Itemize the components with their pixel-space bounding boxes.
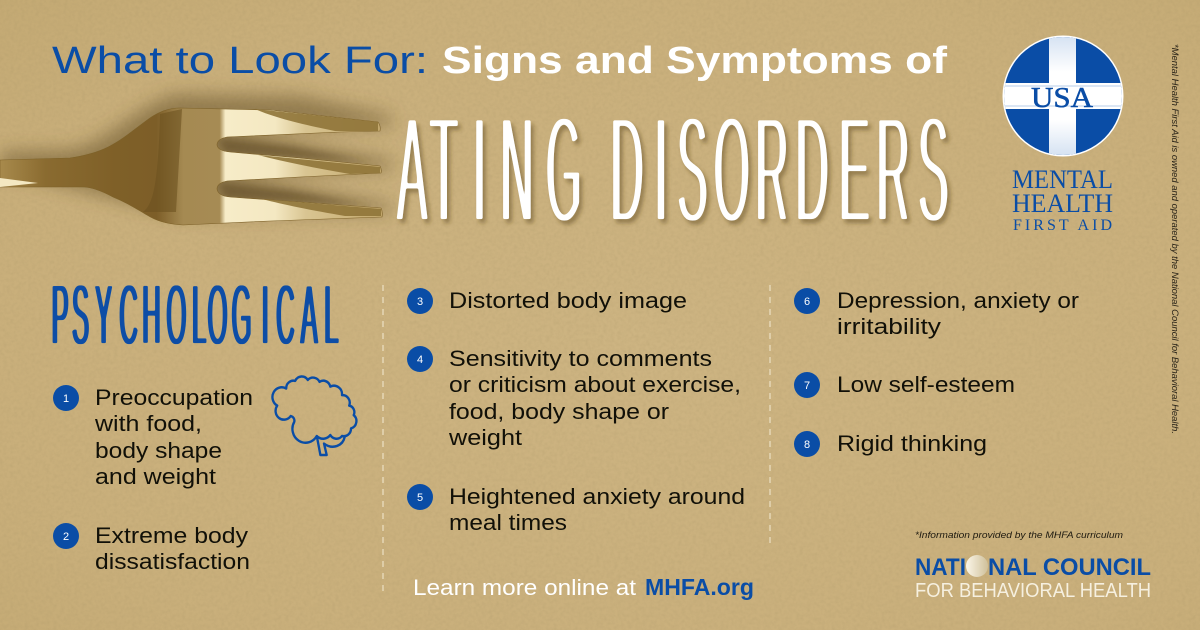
column 2: items 3-5 [407, 288, 745, 535]
logo: National Council for Behavioral Health: NAL COUNCIL [988, 554, 1151, 581]
item 4: 4 [417, 354, 423, 366]
item 2: Extreme body [95, 523, 248, 548]
icon: moon O [966, 555, 988, 577]
logo: Mental Health First Aid USA [1002, 36, 1124, 234]
column 1: items 1-2 [53, 385, 253, 574]
source note: *Information provided by the MHFA curriculum [915, 530, 1123, 541]
title line: What to Look For: Signs and Symptoms of: What to Look For: [52, 40, 428, 82]
item 1 [53, 385, 253, 489]
item 3: Distorted body image [449, 288, 687, 313]
heading: Psychological: PSYCHOLOGICAL [52, 268, 338, 363]
item 1: with food, [94, 411, 202, 436]
item 4: weight [448, 425, 522, 450]
fork highlights [0, 178, 38, 187]
item 6: Depression, anxiety or [837, 288, 1079, 313]
item 7 [794, 372, 1015, 398]
fork shadow [0, 94, 392, 215]
logo: National Council for Behavioral Health: NATI [915, 554, 966, 581]
item 1: and weight [95, 464, 216, 489]
column 3: items 6-8 [794, 288, 1079, 457]
item 6: irritability [837, 314, 941, 339]
item 4: Sensitivity to comments [449, 346, 712, 371]
logo wordmark: MENTAL [1012, 165, 1113, 194]
item 5: Heightened anxiety around [449, 484, 745, 509]
item 1: body shape [95, 438, 222, 463]
logo: National Council for Behavioral Health: FOR BEHAVIORAL HEALTH [915, 580, 1151, 602]
item 5 [407, 484, 745, 535]
fork body [0, 108, 382, 225]
item 3: 3 [417, 296, 423, 308]
item 8: Rigid thinking [837, 431, 987, 456]
item 2: 2 [63, 531, 69, 543]
title line: What to Look For: Signs and Symptoms of [52, 40, 947, 82]
logo wordmark: FIRST AID [1013, 217, 1112, 234]
call to action: Learn more online: MHFA.org [645, 574, 754, 600]
item 8: 8 [804, 439, 810, 451]
item 4 [407, 346, 741, 450]
call to action: Learn more online: Learn more online at [413, 575, 636, 600]
item 7: Low self-esteem [837, 372, 1015, 397]
call to action: Learn more online [413, 574, 754, 600]
item 7: 7 [804, 380, 810, 392]
logo wordmark [1012, 165, 1113, 234]
logo wordmark: HEALTH [1012, 189, 1113, 218]
item 6 [794, 288, 1079, 339]
item 4: or criticism about exercise, [449, 372, 741, 397]
item 1: 1 [63, 393, 69, 405]
item 6: 6 [804, 296, 810, 308]
item 1: Preoccupation [95, 385, 253, 410]
logo badge [1002, 36, 1124, 156]
icon: brain [272, 376, 356, 455]
title line: What to Look For: Signs and Symptoms of: Signs and Symptoms of [442, 40, 947, 82]
item 8 [794, 431, 987, 457]
logo: National Council for Behavioral Health [915, 554, 1151, 602]
item 2: dissatisfaction [95, 549, 250, 574]
item 4: food, body shape or [449, 399, 669, 424]
item 5: meal times [449, 510, 567, 535]
image: golden fork [0, 94, 392, 225]
item 2 [53, 523, 250, 574]
side note: ownership disclaimer: *Mental Health First Aid is owned and operated by the National Council for Behavioral Health. [1169, 44, 1180, 434]
heading: Ating Disorders: ATING DISORDERS [397, 84, 948, 255]
item 5: 5 [417, 492, 423, 504]
logo badge: USA [1031, 83, 1094, 114]
